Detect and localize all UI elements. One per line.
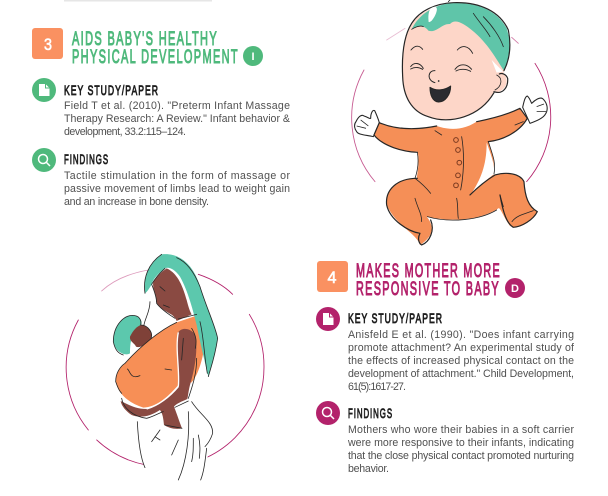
baby hair	[113, 315, 142, 354]
icon: magnifier	[32, 148, 56, 172]
illustration: mother wearing baby in sling	[66, 254, 264, 480]
heading: makes mother more responsive to baby: RESPONSIVE TO BABY	[356, 278, 500, 300]
icon: document	[316, 307, 340, 331]
icon: document	[32, 78, 56, 102]
mouth	[430, 86, 451, 102]
mother face and neck	[153, 268, 192, 321]
findings text: and an increase in bone density.	[64, 196, 209, 208]
findings text: that the close physical contact promoted nurturing	[348, 450, 574, 462]
number badge 4: 4	[328, 268, 336, 287]
findings heading: FINDINGS	[348, 406, 393, 421]
head	[402, 0, 510, 120]
panel: section 4	[316, 260, 574, 475]
ring	[352, 28, 551, 182]
heading: aids baby's healthy physical development: PHYSICAL DEVELOPMENT	[72, 46, 239, 68]
findings text: were more responsive to their infants, indicating	[347, 437, 574, 449]
key study text: Therapy Research: A Review." Infant behavior &	[64, 113, 290, 125]
category badge I	[243, 46, 263, 66]
panel: section 3	[32, 28, 290, 208]
key study text: development, 33.2:115–124.	[64, 126, 186, 138]
heading: makes mother more responsive to baby	[356, 260, 501, 300]
mother arm and baby leg	[121, 329, 196, 429]
number badge 3	[32, 28, 63, 59]
face	[411, 46, 473, 83]
category badge D: D	[511, 283, 519, 295]
sling	[116, 316, 205, 408]
category badge I: I	[251, 51, 255, 63]
heading: aids baby's healthy physical development: AIDS BABY'S HEALTHY	[72, 28, 218, 50]
key study text: Field T et al. (2010). "Preterm Infant Massage	[64, 100, 290, 112]
key study text: Anisfeld E et al. (1990). "Does infant carrying	[348, 329, 574, 341]
findings text: behavior.	[348, 463, 389, 475]
category badge D	[505, 278, 525, 298]
findings text	[347, 424, 574, 475]
skirt	[137, 402, 213, 480]
key study text: 61(5):1617-27.	[348, 381, 406, 393]
key study text: promote attachment? An experimental study of	[348, 342, 574, 354]
findings text: Mothers who wore their babies in a soft carrier	[348, 424, 574, 436]
key study text	[348, 329, 574, 393]
buttons	[454, 138, 462, 188]
key study text: the effects of increased physical contact on the	[348, 355, 574, 367]
key study heading: KEY STUDY/PAPER	[348, 311, 443, 326]
number badge 4	[317, 261, 348, 292]
sleepsuit	[374, 108, 537, 245]
icon: magnifier	[316, 401, 340, 425]
hair	[144, 254, 218, 377]
number badge 3: 3	[44, 35, 52, 54]
heading: aids baby's healthy physical development	[72, 28, 239, 68]
findings text: Tactile stimulation in the form of massage or	[64, 170, 290, 182]
findings heading: FINDINGS	[64, 152, 109, 167]
hands	[355, 96, 547, 137]
outlines	[113, 254, 218, 428]
ring	[66, 270, 264, 467]
key study text	[64, 100, 290, 138]
key study text: development of attachment." Child Development,	[348, 368, 574, 380]
illustration: happy baby in circle	[352, 0, 551, 245]
findings text: passive movement of limbs lead to weight gain	[64, 183, 290, 195]
baby face	[130, 325, 152, 347]
key study heading: KEY STUDY/PAPER	[64, 83, 159, 98]
findings text	[64, 170, 290, 208]
